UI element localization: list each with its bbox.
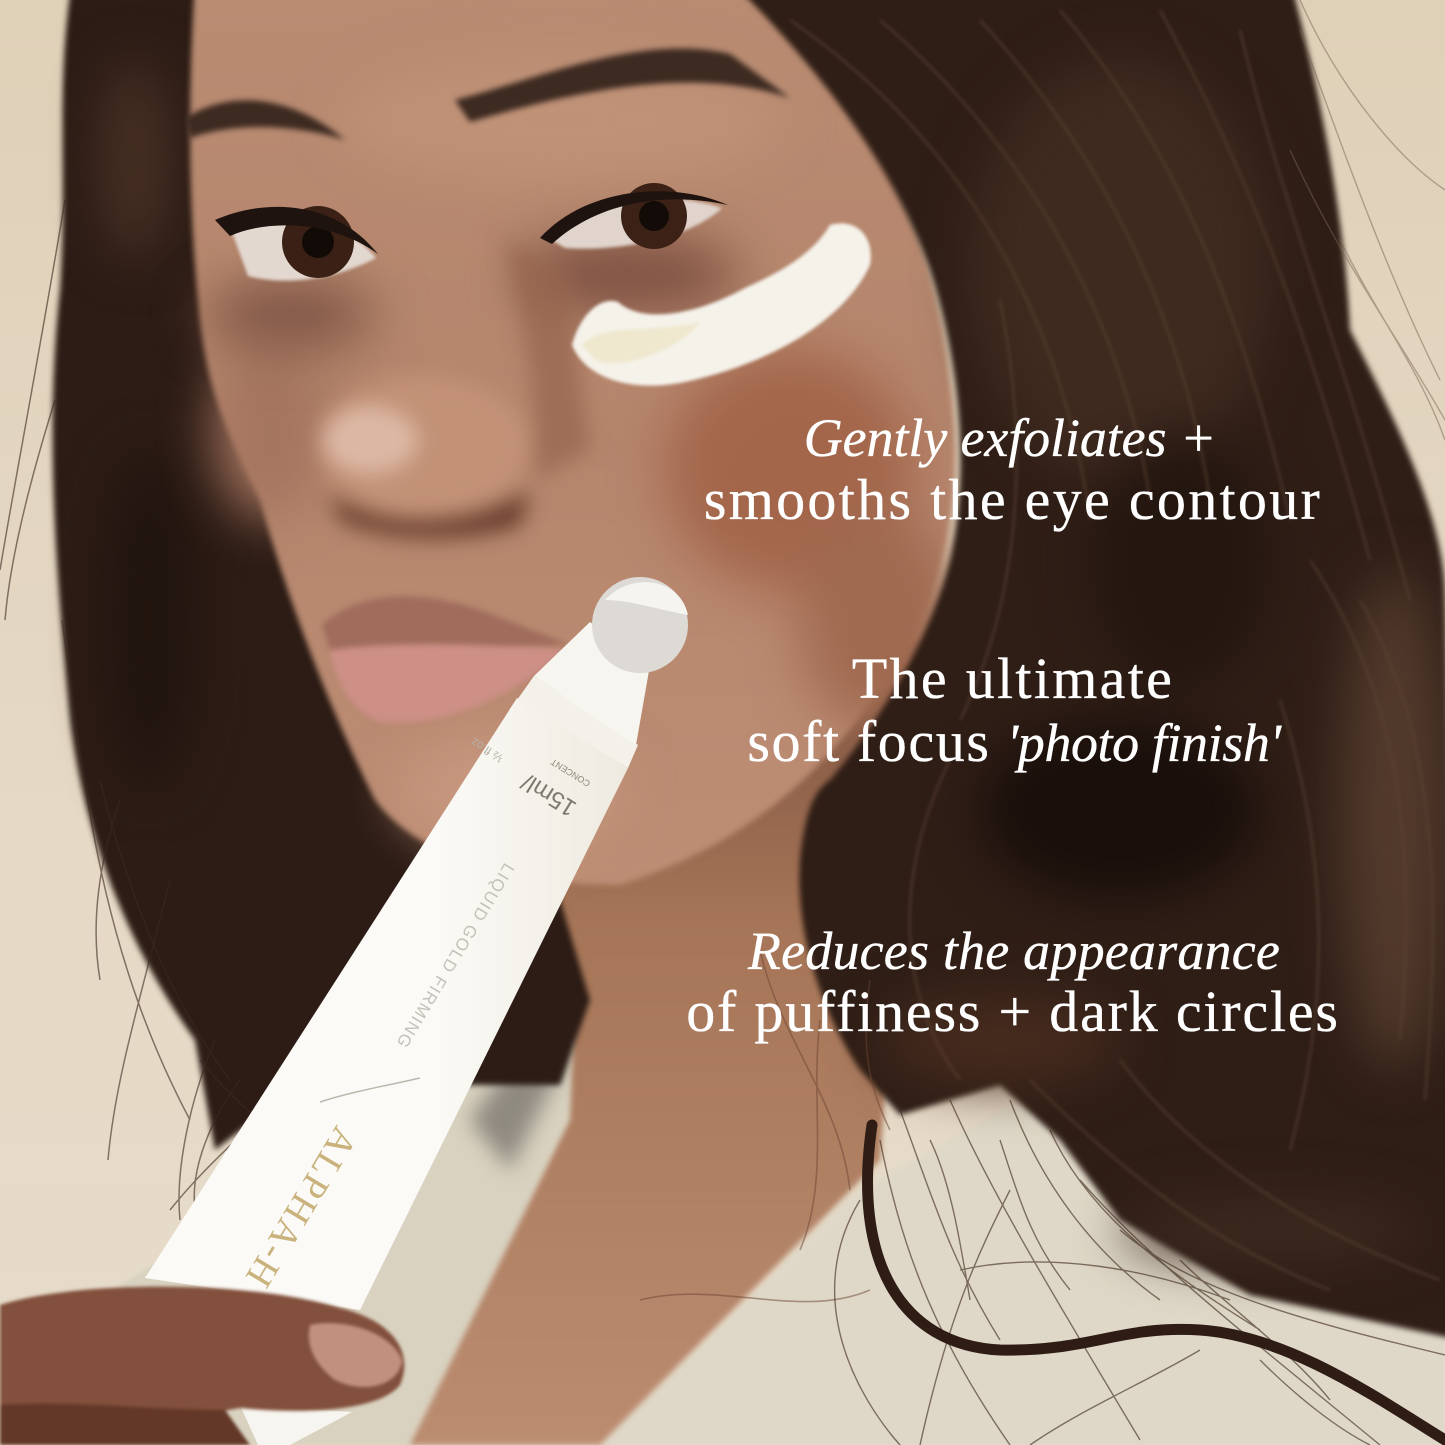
hair: flyaways on wall bbox=[1290, 0, 1445, 440]
eyebrow: left bbox=[185, 100, 345, 140]
applicator ball bbox=[592, 577, 688, 673]
tube nozzle bbox=[534, 622, 650, 745]
caption: photo finish: The ultimate bbox=[852, 646, 1174, 711]
eye: right bbox=[540, 183, 728, 249]
hair: right tone patches bbox=[880, 60, 1445, 1260]
captions bbox=[686, 408, 1340, 1044]
hair: left highlights bbox=[103, 60, 195, 790]
cream swipe under eye bbox=[572, 223, 871, 386]
eyebrow: right bbox=[455, 49, 790, 122]
neck and chest bbox=[410, 640, 920, 1445]
face shading bbox=[215, 60, 960, 845]
hair: fine strands in mass bbox=[790, 10, 1440, 1290]
caption: exfoliates: smooths the eye contour bbox=[704, 467, 1322, 532]
hair: thick curl strand bbox=[868, 1125, 1445, 1440]
caption: puffiness: Reduces the appearance bbox=[747, 921, 1280, 981]
tube label: concentrate: CONCENT bbox=[549, 756, 592, 789]
tube label: brand: ALPHA-H bbox=[236, 1119, 365, 1296]
product: white tube bbox=[145, 577, 688, 1310]
tube end below finger bbox=[240, 1405, 352, 1445]
face bbox=[190, 0, 955, 885]
tube label: size: 15ml/ bbox=[517, 768, 581, 822]
hair: strands over robe bbox=[835, 1100, 1445, 1445]
garment: cream robe bbox=[120, 1005, 1445, 1445]
caption: puffiness bbox=[686, 921, 1340, 1044]
hair: left wisps bbox=[0, 200, 330, 1220]
nose bbox=[320, 240, 590, 538]
caption: exfoliates bbox=[704, 408, 1322, 532]
hand: fingers holding tube bbox=[0, 1287, 404, 1445]
hair: left side bbox=[53, 0, 590, 1150]
caption: puffiness: of puffiness + dark circles bbox=[686, 979, 1340, 1044]
tube label: product: LIQUID GOLD FIRMING bbox=[392, 860, 518, 1052]
hair: right side bbox=[730, 0, 1445, 1340]
tube label: fluid ounces: ½ fl.oz bbox=[468, 735, 506, 765]
lips bbox=[322, 596, 570, 723]
garment: lapel shadow bbox=[470, 1030, 565, 1170]
caption: exfoliates: Gently exfoliates + bbox=[804, 408, 1216, 468]
eye: left bbox=[215, 206, 378, 281]
tube collar bbox=[517, 676, 638, 768]
caption: photo finish bbox=[747, 646, 1282, 774]
caption: photo finish: soft focus 'photo finish' bbox=[747, 709, 1282, 774]
hair: strands over neck bbox=[640, 950, 890, 1302]
under-eye shadows bbox=[205, 235, 740, 350]
